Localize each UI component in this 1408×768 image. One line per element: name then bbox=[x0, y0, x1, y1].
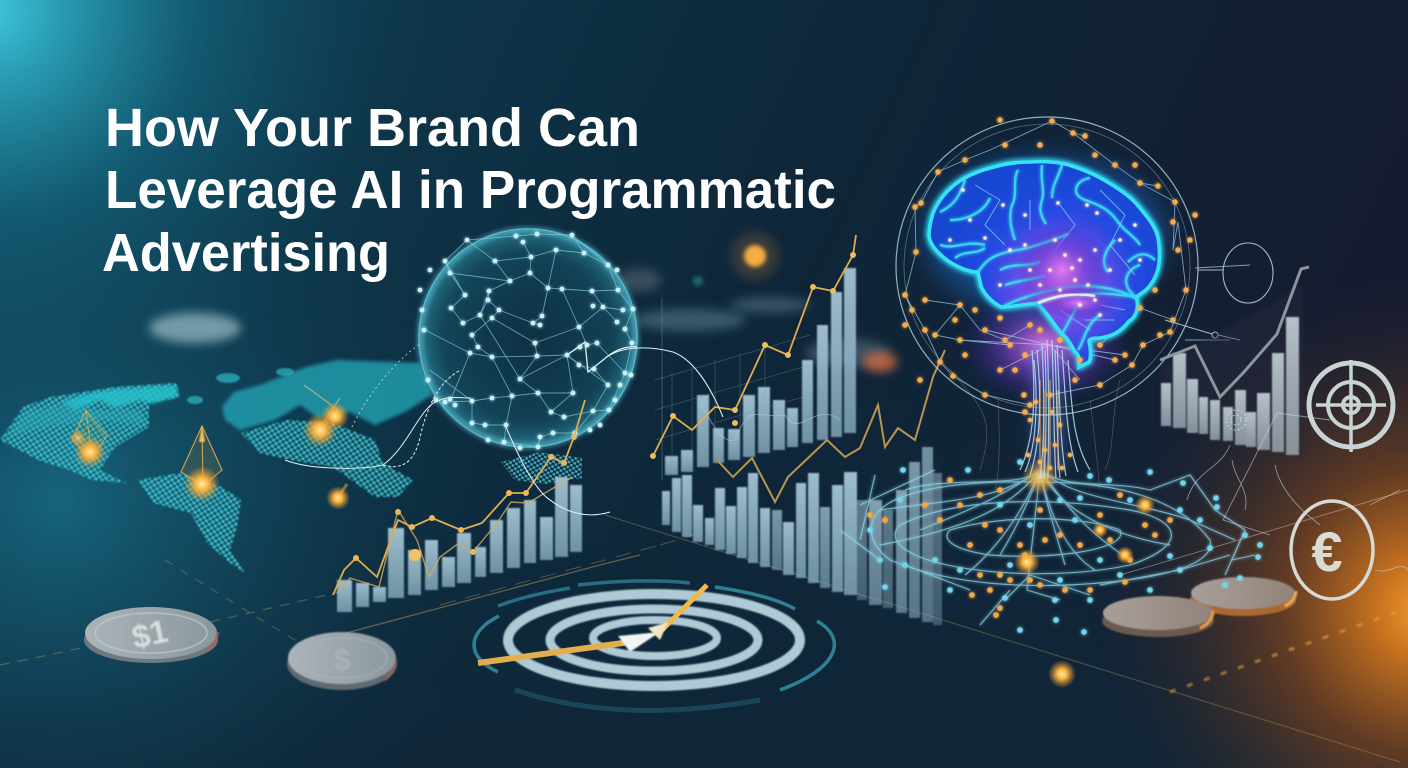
coin: dollar blurred: $ bbox=[334, 644, 351, 677]
coins left bbox=[84, 607, 397, 690]
title bbox=[102, 99, 836, 283]
coin: dollar blurred bbox=[287, 632, 397, 690]
brain inner sparks bbox=[950, 190, 1140, 315]
map: north america bbox=[0, 383, 180, 483]
brain body bbox=[929, 162, 1160, 367]
chart: middle upper grid and gold line bbox=[653, 235, 856, 480]
chart: middle upper bars bbox=[665, 268, 856, 475]
thin circuit lines bbox=[1187, 413, 1408, 571]
network globe bbox=[418, 228, 638, 448]
coin: back bbox=[1190, 577, 1296, 616]
pin: south america bbox=[181, 425, 222, 502]
title: Advertising bbox=[102, 224, 390, 283]
pin: small gold dot bbox=[326, 484, 350, 510]
map: australia bbox=[501, 452, 582, 484]
target gold arrow bbox=[478, 585, 707, 663]
map: south america bbox=[138, 473, 245, 573]
title: How Your Brand Can bbox=[105, 99, 640, 158]
coin: dollar bbox=[84, 607, 218, 663]
icon: euro bbox=[1291, 501, 1373, 599]
concentric target bbox=[474, 581, 834, 710]
target rings bbox=[508, 594, 800, 686]
globe connections bbox=[425, 234, 633, 447]
chart: middle lower bars bbox=[662, 447, 942, 625]
pin: north america bbox=[69, 410, 107, 468]
chart: right trend line bbox=[1160, 267, 1309, 397]
coin: front bbox=[1102, 596, 1214, 637]
chart: right bars bbox=[1160, 267, 1309, 455]
network base orange nodes bbox=[870, 480, 1170, 615]
map: eurasia and africa bbox=[222, 360, 432, 497]
target outer arcs bbox=[474, 581, 834, 710]
map pins bbox=[69, 385, 350, 510]
globe inner wire shape bbox=[567, 342, 637, 372]
connector curves bbox=[285, 343, 723, 515]
small gold dot bottom bbox=[1048, 660, 1076, 688]
brain folds bbox=[940, 165, 1155, 350]
brain halo rings bbox=[896, 117, 1198, 415]
chart: middle lower gold line bbox=[717, 350, 945, 502]
brain trunk fibres bbox=[950, 285, 1130, 490]
world map bbox=[0, 360, 582, 573]
brain hologram bbox=[896, 117, 1250, 490]
network base web bbox=[840, 470, 1255, 625]
small ring annotation bbox=[1165, 243, 1273, 340]
chart: lower-left bars bbox=[337, 477, 582, 612]
title: Leverage AI in Programmatic bbox=[105, 161, 836, 220]
coins right bbox=[1102, 577, 1296, 637]
network base hot spots bbox=[1014, 459, 1155, 575]
chart: lower-left gold trend lines bbox=[333, 400, 585, 595]
small network emblem bbox=[1226, 410, 1246, 430]
blurred background lights bbox=[149, 232, 897, 372]
pin: europe bbox=[303, 385, 349, 447]
icon: target crosshair bbox=[1309, 360, 1393, 452]
brain thin inner veins bbox=[975, 185, 1135, 330]
brain constellation lines bbox=[905, 121, 1250, 405]
small map islands bbox=[187, 368, 294, 404]
brain glow backing bbox=[923, 155, 1167, 315]
brain orange constellation nodes bbox=[905, 120, 1195, 412]
network base cyan nodes bbox=[870, 462, 1260, 632]
brain purple core bbox=[1016, 224, 1108, 316]
floor grid lines bbox=[0, 490, 1408, 762]
icon: euro: € bbox=[1311, 520, 1343, 583]
coin: dollar: $1 bbox=[129, 613, 171, 655]
globe nodes bbox=[420, 234, 633, 448]
network base under brain bbox=[840, 459, 1260, 632]
